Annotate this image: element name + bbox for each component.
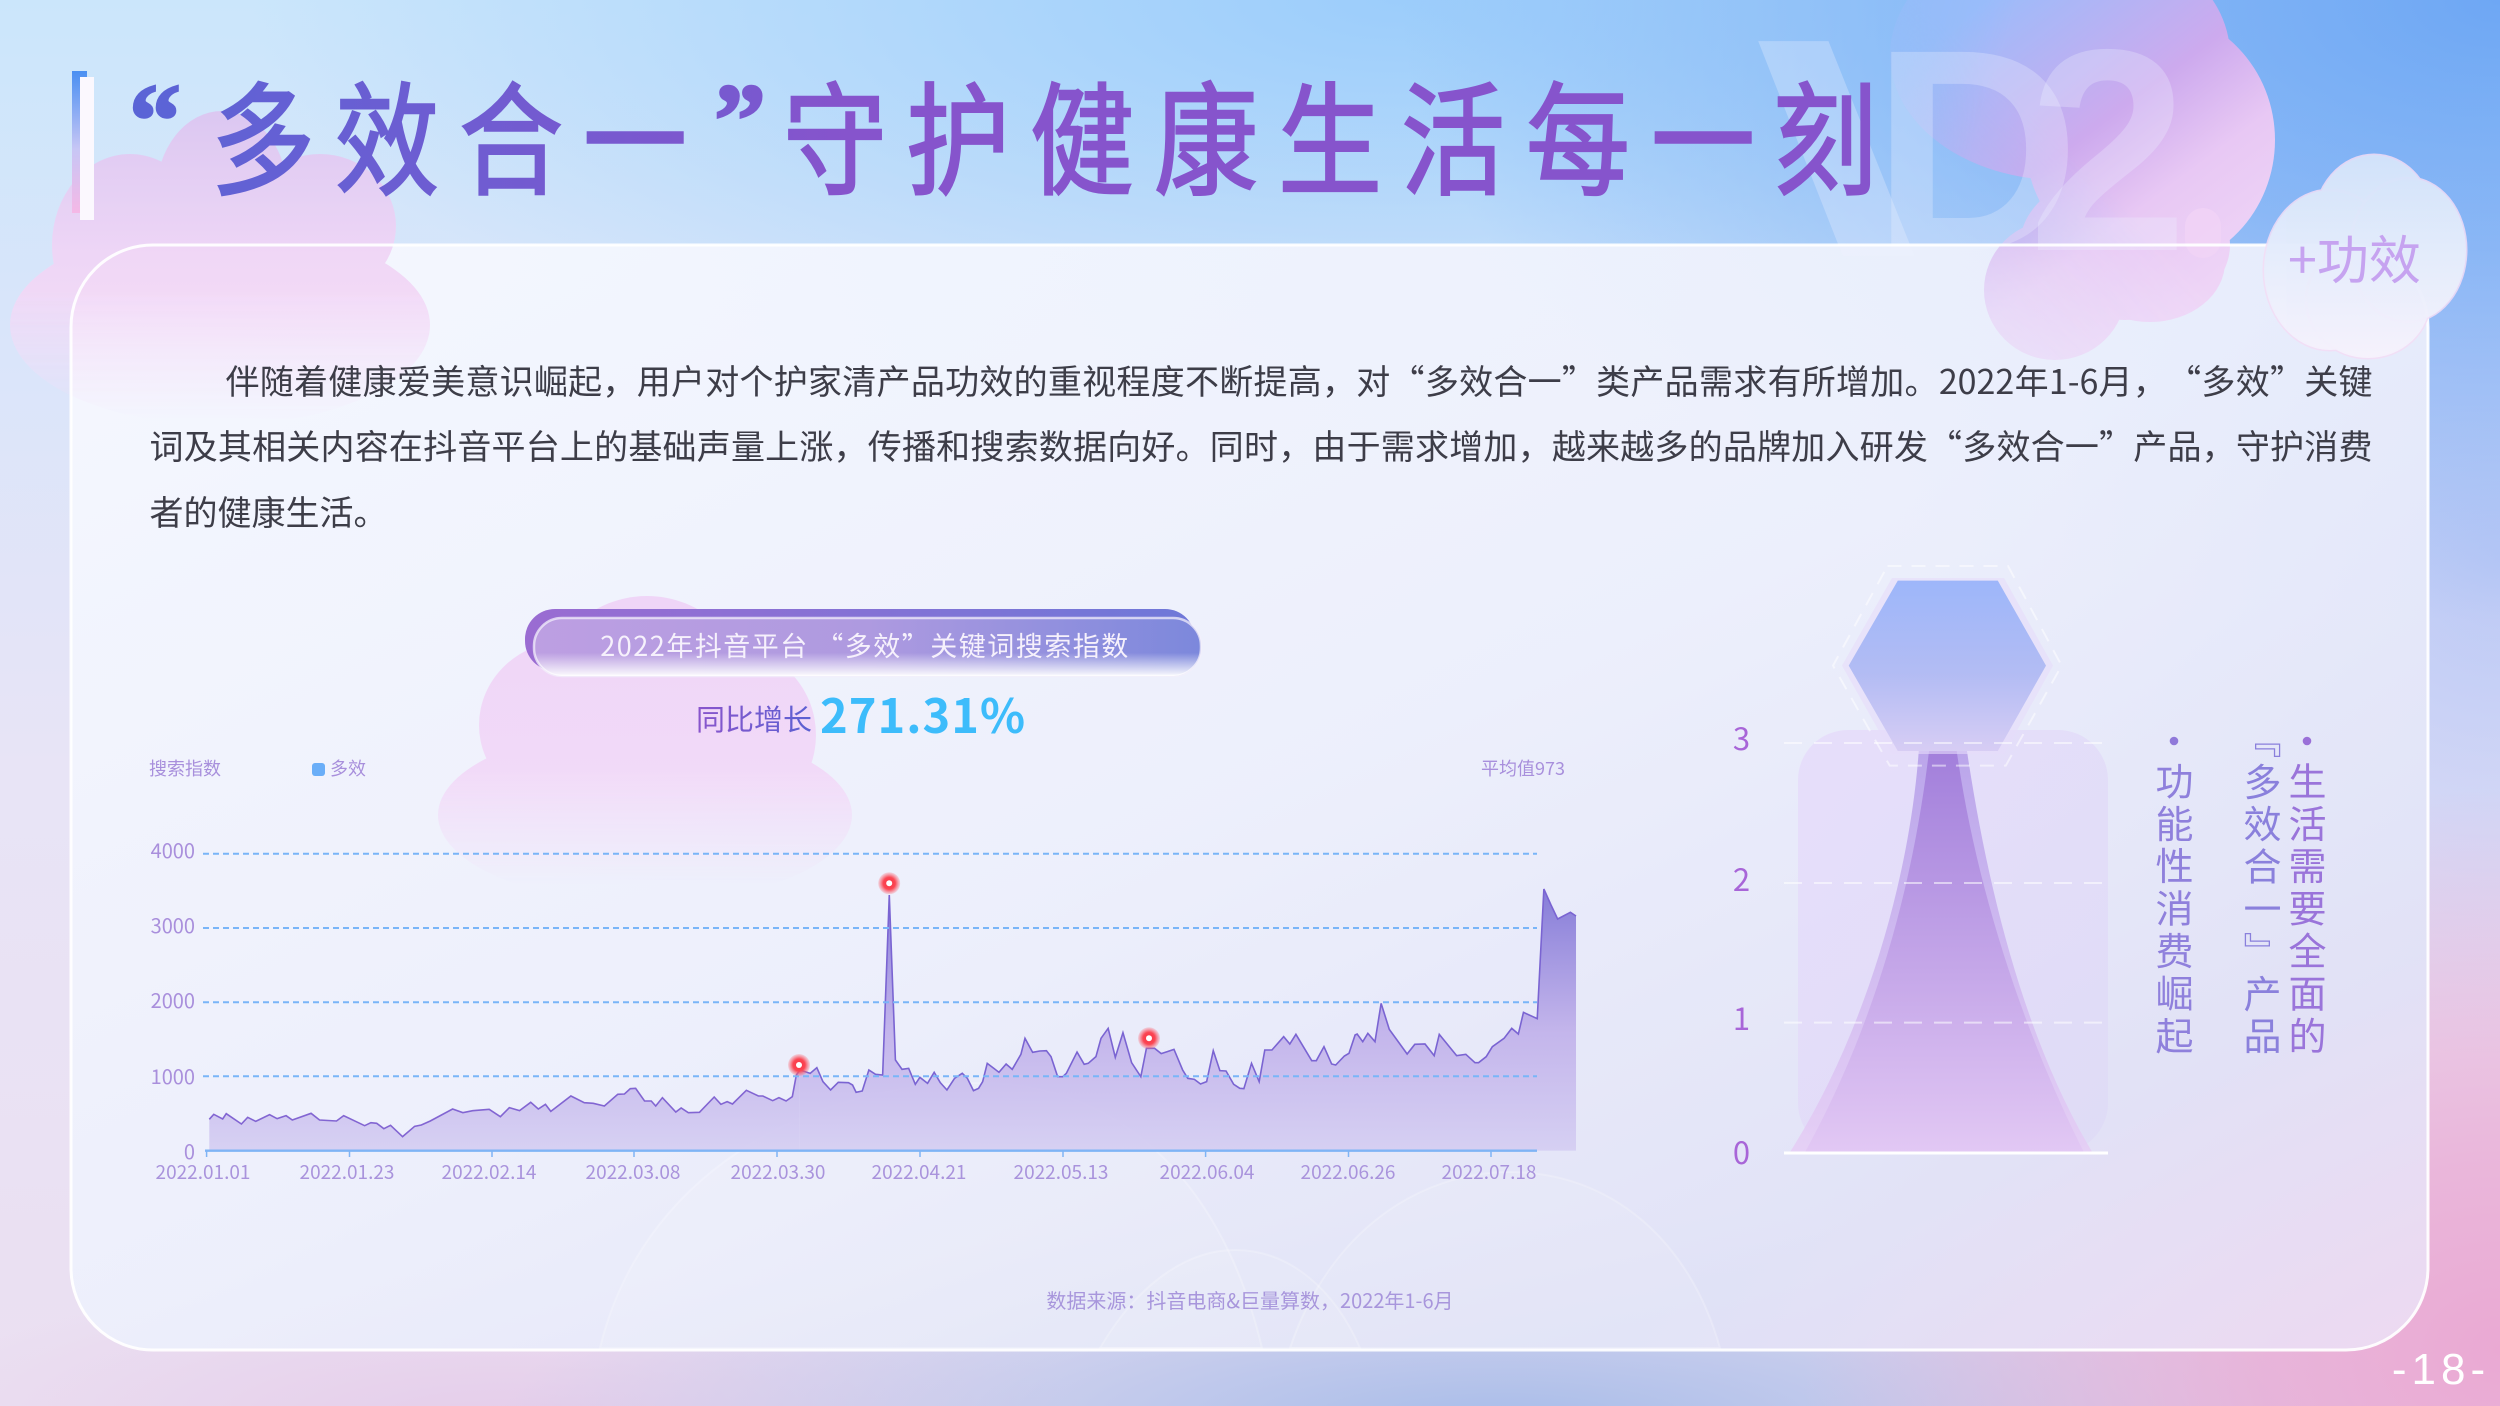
y labels: 2	[1733, 855, 1750, 900]
vertical note: 『多效合一』产品: 『多效合一』产品	[2235, 720, 2290, 1059]
y axis labels: 1000	[151, 1061, 195, 1090]
page number: -18-	[2392, 1345, 2490, 1394]
x axis labels: 2022.06.26	[1301, 1158, 1395, 1185]
y axis labels: 4000	[151, 835, 195, 864]
panel border	[71, 245, 2428, 1350]
x axis labels: 2022.06.04	[1160, 1158, 1254, 1185]
y labels: 1	[1733, 994, 1750, 1039]
vertical note: 生活需要全面的: 生活需要全面的	[2280, 762, 2335, 1059]
y labels	[1733, 714, 1750, 1173]
y axis labels: 2000	[151, 985, 195, 1014]
y axis labels: 3000	[151, 910, 195, 939]
title accent bar	[72, 71, 94, 220]
gridlines	[1784, 743, 2108, 1023]
cloud label: +功效	[2288, 219, 2421, 294]
title: “	[129, 63, 181, 178]
title: 多效合一守护健康生活每一刻	[211, 44, 1877, 221]
y labels: 0	[1733, 1128, 1750, 1173]
cloud: +功效 tag	[2264, 155, 2466, 358]
x axis labels: 2022.07.18	[1442, 1158, 1536, 1185]
x axis labels: 2022.01.23	[300, 1158, 394, 1185]
body paragraph	[150, 355, 2372, 535]
rounded backdrop	[1798, 730, 2108, 1153]
growth callout: 271.31%	[820, 678, 1026, 747]
source note: 数据来源：抖音电商&巨量算数，2022年1-6月	[1046, 1285, 1454, 1314]
body paragraph: 者的健康生活。	[150, 486, 388, 535]
grid lines	[203, 854, 1537, 1076]
chart: search index area chart	[149, 755, 1576, 1185]
chart: bottle trend diagram	[1733, 566, 2311, 1173]
vertical note: 功能性消费崛起: 功能性消费崛起	[2147, 762, 2202, 1059]
bell curves	[1789, 751, 2093, 1153]
x axis labels: 2022.05.13	[1014, 1158, 1108, 1185]
x axis	[205, 1151, 1537, 1157]
body paragraph: 词及其相关内容在抖音平台上的基础声量上涨，传播和搜索数据向好。同时，由于需求增加，越来越多的品牌加入研发“多效合一”产品，守护消费	[150, 420, 2372, 469]
peak markers	[788, 872, 1160, 1076]
cloud: top right pink-blue	[1890, 0, 2275, 360]
x axis labels: 2022.03.08	[586, 1158, 680, 1185]
growth callout	[696, 678, 1026, 747]
hexagon	[1833, 566, 2062, 766]
legend	[312, 755, 366, 781]
y labels: 3	[1733, 714, 1750, 759]
legend: 多效	[330, 755, 366, 781]
body paragraph: 伴随着健康爱美意识崛起，用户对个护家清产品功效的重视程度不断提高，对“多效合一”类产品需求有所增加。2022年1-6月，“多效”关键	[226, 355, 2372, 404]
x axis labels: 2022.04.21	[872, 1158, 966, 1185]
axis title: 搜索指数	[149, 755, 221, 781]
y axis labels	[151, 835, 195, 1165]
x axis labels: 2022.01.01	[156, 1158, 250, 1185]
chart title pill	[525, 609, 1201, 676]
title: ”	[714, 63, 766, 178]
cloud: top left pink	[10, 111, 430, 378]
average label: 平均值973	[1481, 755, 1565, 781]
pill text: 2022年抖音平台 “多效”关键词搜索指数	[600, 625, 1130, 664]
panel: main content card	[71, 245, 2428, 1350]
cloud: behind chart title	[438, 596, 852, 844]
bullets	[2170, 737, 2311, 745]
x axis labels: 2022.02.14	[442, 1158, 536, 1185]
x axis labels: 2022.03.30	[731, 1158, 825, 1185]
baseline	[1784, 1152, 2108, 1154]
decorative arcs at panel bottom	[600, 1083, 1720, 1348]
y axis labels: 0	[184, 1136, 195, 1165]
area series	[209, 889, 1576, 1151]
growth callout: 同比增长	[696, 697, 812, 739]
watermark letters	[1752, 0, 2221, 312]
x axis labels	[156, 1158, 1536, 1185]
